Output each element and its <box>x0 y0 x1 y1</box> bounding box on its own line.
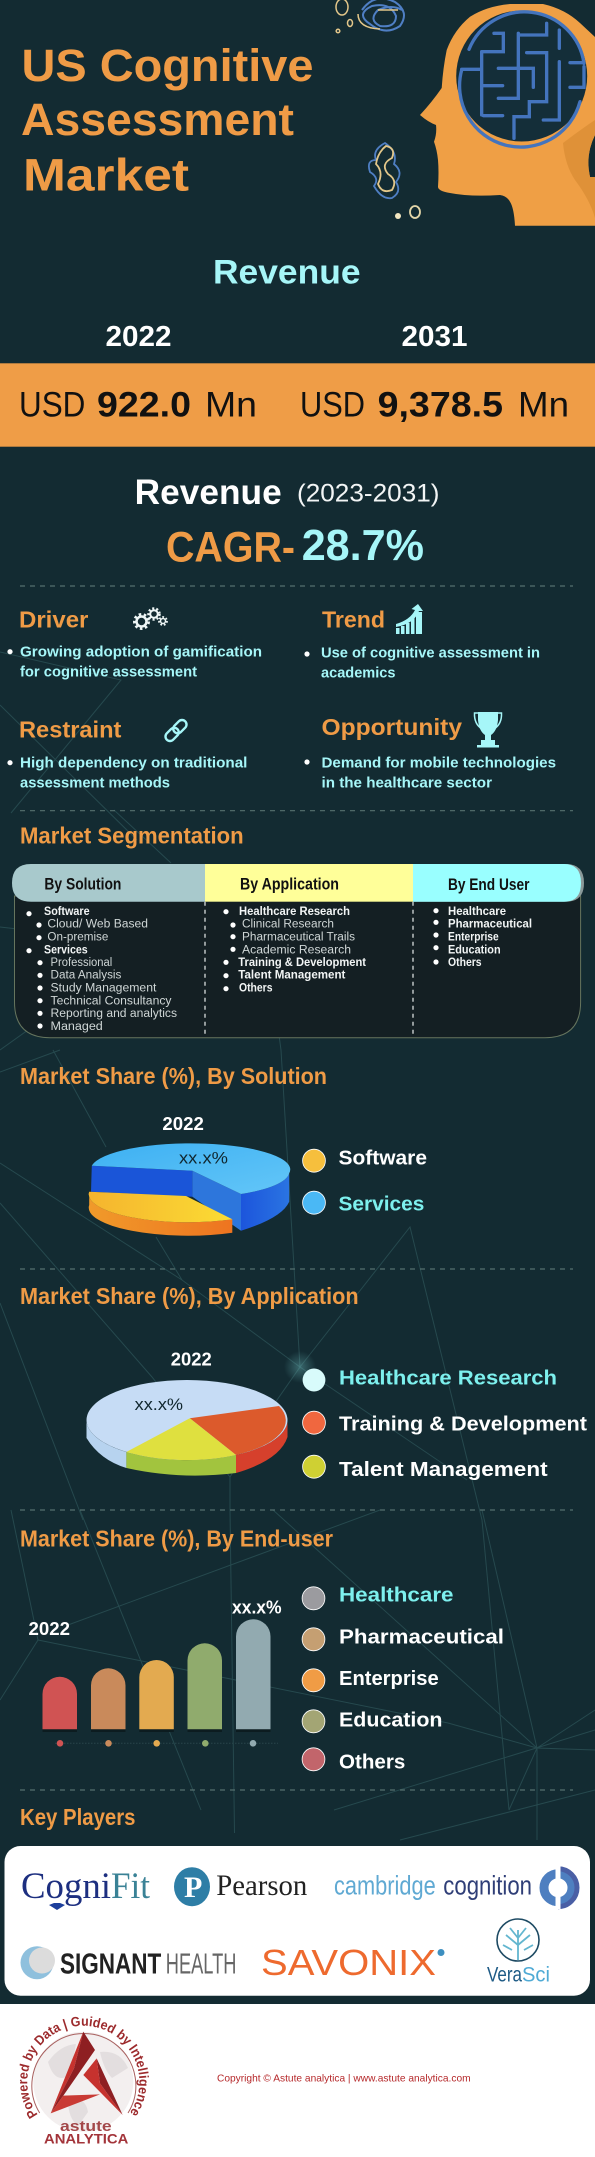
revenue band: USD <box>19 386 85 425</box>
logo: cognifit: Fit <box>111 1866 151 1907</box>
list: by application: Pharmaceutical Trails <box>242 931 355 943</box>
logo: verasci: Vera <box>487 1964 522 1987</box>
list: by application: Others <box>239 983 272 995</box>
logo: pearson <box>174 1867 307 1906</box>
list: by solution: On-premise <box>47 931 108 943</box>
icon: thought scribble top <box>336 0 404 33</box>
network glow <box>284 1351 316 1383</box>
legend: application: Healthcare Research <box>339 1367 557 1389</box>
list: by application: Talent Management <box>238 970 346 982</box>
list: by solution: Services <box>44 944 88 956</box>
legend: end-user <box>302 1585 504 1773</box>
logo: pearson: P <box>184 1871 202 1904</box>
legend: end-user: Education <box>339 1710 442 1732</box>
revenue cagr heading: (2023-2031) <box>297 480 440 508</box>
revenue cagr heading: Revenue <box>135 473 282 512</box>
footer background <box>0 2004 595 2157</box>
chart: application pie: xx.x% <box>135 1395 183 1414</box>
header: by solution <box>12 864 205 902</box>
list: by end user <box>433 906 532 969</box>
revenue band: Mn <box>518 386 569 425</box>
legend: application: Training & Development <box>339 1414 587 1436</box>
list: by application: Healthcare Research <box>239 906 350 918</box>
chart: end-user bars <box>28 1596 282 1747</box>
panel: restraint: High dependency on traditional <box>20 754 247 771</box>
header: by solution: By Solution <box>44 875 121 893</box>
chart: end-user bars: 2022 <box>28 1618 70 1639</box>
panel: key players <box>4 1846 590 1996</box>
heading: share by solution: Market Share (%), By Solution <box>20 1063 327 1089</box>
list: by application: Training & Development <box>238 957 366 969</box>
panel: opportunity: Demand for mobile technologies <box>322 754 556 771</box>
copyright: Copyright © Astute analytica | www.astute analytica.com <box>217 2073 471 2085</box>
heading: key players: Key Players <box>20 1804 136 1830</box>
logo: astute analytica: Powered by Data | Guided by Intelligence <box>20 2016 149 2119</box>
list: by solution: Software <box>44 906 90 918</box>
list: by application: Academic Research <box>242 944 351 956</box>
year labels: 2031 <box>402 321 468 353</box>
logo: signant health: SIGNANT <box>60 1948 162 1980</box>
title: US Cognitive <box>22 40 314 91</box>
title <box>21 40 314 201</box>
logo: astute analytica: ANALYTICA <box>44 2131 129 2146</box>
cagr value: 28.7% <box>302 521 424 570</box>
list: by end user: Enterprise <box>448 931 499 943</box>
blue wedge walls <box>91 1143 290 1231</box>
logo: signant health: HEALTH <box>166 1948 236 1980</box>
panel: opportunity: in the healthcare sector <box>322 774 492 791</box>
yellow wedge <box>89 1192 232 1236</box>
logo: verasci: Sci <box>522 1964 550 1987</box>
panel: trend: Trend <box>322 607 385 633</box>
chart: solution pie: xx.x% <box>179 1148 228 1167</box>
panel: opportunity: Opportunity <box>322 714 462 740</box>
panel: trend: Use of cognitive assessment in <box>321 645 540 662</box>
list: by solution: Reporting and analytics <box>50 1008 177 1020</box>
legend: application: Talent Management <box>339 1459 548 1481</box>
chart: solution pie <box>89 1113 290 1236</box>
header: by application: By Application <box>240 875 339 893</box>
logo: signant health <box>20 1946 236 1980</box>
year labels: 2022 <box>106 321 172 353</box>
list: by end user: Pharmaceutical <box>448 919 532 931</box>
legend: application <box>303 1367 587 1481</box>
panel: driver: for cognitive assessment <box>20 664 197 681</box>
revenue band: 922.0 <box>97 386 191 425</box>
list: by solution <box>26 906 177 1033</box>
list: by solution: Technical Consultancy <box>50 995 172 1007</box>
logo: pearson: Pearson <box>216 1869 307 1902</box>
legend: end-user: Pharmaceutical <box>339 1626 504 1648</box>
panel: driver <box>7 607 262 681</box>
revenue band: Mn <box>205 386 257 425</box>
list: by application: Clinical Research <box>242 919 334 931</box>
list: by solution: Data Analysis <box>50 970 122 982</box>
cagr value: CAGR- <box>166 524 295 572</box>
legend: solution: Software <box>338 1147 427 1169</box>
panel: restraint: assessment methods <box>20 774 170 791</box>
panel: restraint: Restraint <box>19 717 122 743</box>
logo: cognifit: Cogni <box>21 1866 111 1907</box>
title: Assessment <box>21 94 294 145</box>
legend: end-user: Others <box>339 1751 405 1773</box>
list: by end user: Others <box>448 957 482 969</box>
icon: chain link <box>164 718 188 743</box>
heading: revenue: Revenue <box>213 253 360 291</box>
heading: share by application: Market Share (%), By Application <box>20 1283 359 1309</box>
panel: opportunity <box>304 714 556 791</box>
header: by application <box>205 864 413 902</box>
legend: solution <box>303 1147 427 1215</box>
chart: application pie: 2022 <box>171 1349 212 1370</box>
panel: restraint <box>7 717 247 791</box>
logo: cognifit <box>21 1866 151 1910</box>
chart: end-user bars: xx.x% <box>232 1596 282 1617</box>
legend: solution: Services <box>338 1193 424 1215</box>
legend: end-user: Enterprise <box>339 1668 439 1690</box>
icon: gears <box>134 608 167 628</box>
title: Market <box>23 150 189 201</box>
list: by solution: Managed <box>50 1021 103 1033</box>
logo: astute analytica: astute <box>60 2118 112 2135</box>
logo: cambridge cognition <box>334 1866 577 1909</box>
panel: trend: academics <box>321 664 396 681</box>
header: by end user <box>413 864 584 902</box>
revenue band <box>0 363 595 447</box>
heading: share by end-user: Market Share (%), By End-user <box>20 1526 333 1552</box>
header: by end user: By End User <box>448 876 530 894</box>
year labels <box>106 321 468 353</box>
chart: application pie <box>86 1349 288 1476</box>
cagr value <box>166 521 424 572</box>
icon: thought scribble bottom <box>369 143 420 219</box>
legend: end-user: Healthcare <box>339 1585 454 1607</box>
list: by end user: Education <box>448 944 501 956</box>
logo: verasci <box>487 1919 550 1987</box>
icon: head with maze <box>420 4 595 226</box>
background network lines <box>0 652 595 1840</box>
list: by solution: Professional <box>50 957 112 969</box>
panel: trend <box>304 607 540 681</box>
revenue band: USD <box>300 386 365 425</box>
logo: cambridge cognition: cambridge <box>334 1870 436 1900</box>
panel: driver: Driver <box>19 607 88 633</box>
list: by solution: Cloud/ Web Based <box>47 919 148 931</box>
icon: trophy <box>474 712 502 748</box>
logo: savonix: SAVONIX <box>261 1942 436 1983</box>
list: by application <box>223 906 366 995</box>
revenue cagr heading <box>135 473 439 512</box>
panel: driver: Growing adoption of gamification <box>20 644 262 661</box>
heading: market segmentation: Market Segmentation <box>20 822 244 848</box>
panel: segmentation table <box>12 864 584 1038</box>
list: by end user: Healthcare <box>448 906 506 918</box>
list: by solution: Study Management <box>50 983 157 995</box>
icon: trend arrow <box>396 604 423 634</box>
revenue band: 9,378.5 <box>378 386 503 425</box>
chart: solution pie: 2022 <box>162 1113 204 1134</box>
logo: cambridge cognition: cognition <box>443 1870 532 1900</box>
